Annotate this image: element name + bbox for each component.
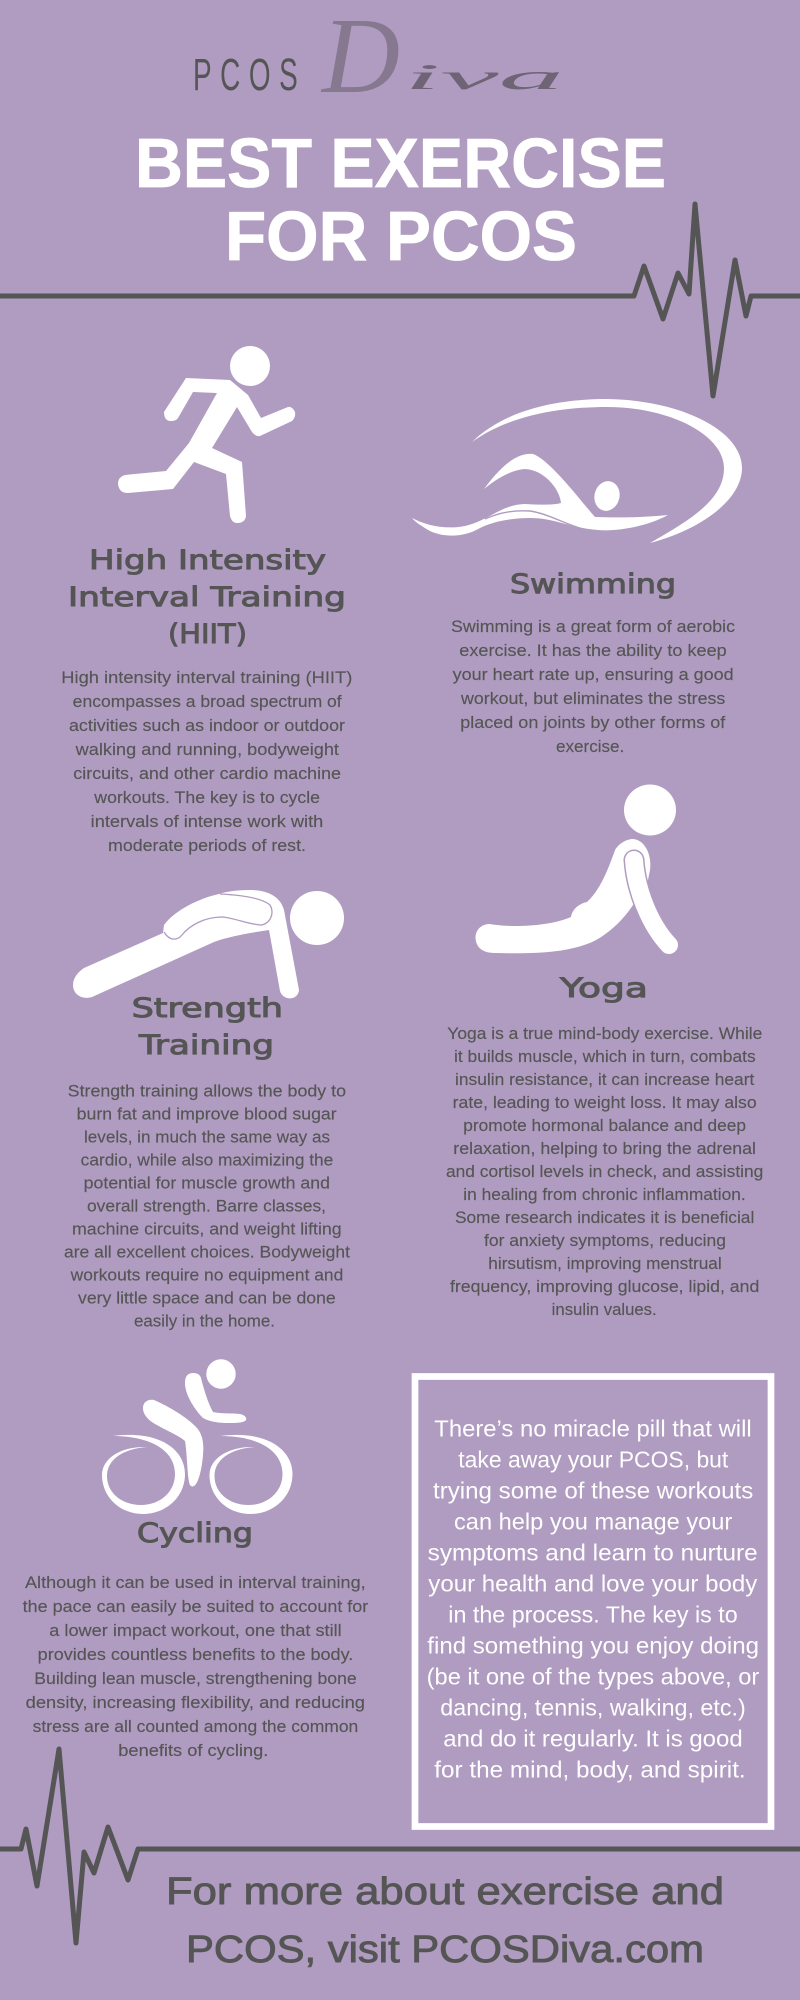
text: cycling description: the pace can easily be suited to account for	[23, 1598, 369, 1616]
callout: closing message box: trying some of these workouts	[433, 1478, 753, 1504]
text: strength description: workouts require no equipment and	[70, 1267, 343, 1285]
text: cycling description: stress are all counted among the common	[33, 1718, 358, 1736]
text: strength description	[64, 1083, 350, 1331]
text: strength description: levels, in much the same way as	[84, 1129, 330, 1147]
text: HIIT description: encompasses a broad spectrum of	[73, 693, 342, 711]
text: cycling description	[23, 1574, 369, 1760]
text: HIIT description: moderate periods of rest.	[108, 837, 306, 855]
text: cycling description: density, increasing flexibility, and reducing	[26, 1694, 365, 1712]
text: swimming description: Swimming is a great form of aerobic	[451, 618, 735, 636]
text: cycling description: a lower impact workout, one that still	[49, 1622, 342, 1640]
text: HIIT description: High intensity interval training (HIIT)	[61, 669, 352, 687]
callout: closing message box: There’s no miracle pill that will	[434, 1416, 752, 1442]
callout: closing message box: take away your PCOS, but	[458, 1447, 729, 1473]
text: cycling description: Although it can be used in interval training,	[25, 1574, 366, 1592]
icon: swimmer	[412, 399, 742, 543]
text: HIIT description	[61, 669, 352, 855]
text: strength description: are all excellent choices. Bodyweight	[64, 1244, 350, 1262]
text: swimming description	[451, 618, 735, 756]
heading: strength training	[132, 993, 283, 1061]
text: yoga description: rate, leading to weight loss. It may also	[453, 1094, 757, 1112]
logo: PCOS Diva: D	[320, 0, 400, 116]
panel: cycling	[23, 1359, 369, 1760]
top heartbeat line	[0, 204, 800, 396]
panel: HIIT	[61, 346, 352, 855]
callout: closing message box: your health and love your body	[428, 1571, 758, 1597]
text: yoga description: and cortisol levels in check, and assisting	[446, 1163, 763, 1181]
text: swimming description: exercise.	[556, 738, 624, 756]
text: swimming description: your heart rate up, ensuring a good	[453, 666, 734, 684]
logo: PCOS Diva: iva	[404, 57, 564, 97]
text: yoga description: for anxiety symptoms, reducing	[484, 1232, 726, 1250]
callout: closing message box: symptoms and learn to nurture	[428, 1540, 758, 1566]
text: yoga description: relaxation, helping to bring the adrenal	[453, 1140, 756, 1158]
footer call to action: For more about exercise and	[166, 1871, 724, 1913]
text: yoga description	[446, 1025, 763, 1319]
callout: closing message box: find something you enjoy doing	[427, 1633, 759, 1659]
text: yoga description: insulin resistance, it can increase heart	[455, 1071, 755, 1089]
heading: HIIT: Interval Training	[68, 582, 346, 613]
text: yoga description: Yoga is a true mind-body exercise. While	[447, 1025, 762, 1043]
heading: strength training: Strength	[132, 993, 283, 1024]
heading: HIIT: High Intensity	[89, 545, 326, 576]
callout: closing message box: in the process. The key is to	[448, 1602, 738, 1628]
icon: yoga pose	[476, 784, 676, 953]
callout: closing message box: can help you manage your	[454, 1509, 732, 1535]
logo: PCOS Diva: PCOS	[193, 49, 298, 100]
text: swimming description: exercise. It has the ability to keep	[459, 642, 727, 660]
heading: yoga: Yoga	[559, 973, 648, 1004]
text: strength description: burn fat and improve blood sugar	[77, 1106, 337, 1124]
text: strength description: overall strength. Barre classes,	[87, 1198, 326, 1216]
icon: cyclist	[102, 1359, 292, 1514]
footer call to action	[166, 1871, 724, 1971]
icon: runner	[118, 346, 295, 523]
text: strength description: Strength training allows the body to	[68, 1083, 346, 1101]
panel: strength training	[64, 890, 350, 1331]
heading: HIIT: (HIIT)	[168, 619, 247, 650]
bottom heartbeat line	[0, 1749, 800, 1943]
title: BEST EXERCISE	[135, 124, 666, 202]
callout: closing message box	[415, 1376, 771, 1826]
logo: PCOS Diva	[193, 0, 564, 116]
text: strength description: very little space and can be done	[78, 1290, 336, 1308]
text: swimming description: placed on joints by other forms of	[460, 714, 726, 732]
text: yoga description: in healing from chronic inflammation.	[463, 1186, 746, 1204]
footer call to action: PCOS, visit PCOSDiva.com	[186, 1929, 704, 1971]
title	[135, 124, 666, 275]
text: strength description: potential for muscle growth and	[84, 1175, 330, 1193]
text: yoga description: Some research indicates it is beneficial	[455, 1209, 754, 1227]
text: HIIT description: circuits, and other cardio machine	[73, 765, 341, 783]
text: cycling description: provides countless benefits to the body.	[38, 1646, 353, 1664]
text: HIIT description: activities such as indoor or outdoor	[69, 717, 346, 735]
callout: closing message box: dancing, tennis, walking, etc.)	[440, 1695, 746, 1721]
text: cycling description: Building lean muscle, strengthening bone	[34, 1670, 357, 1688]
text: yoga description: insulin values.	[552, 1301, 657, 1319]
text: HIIT description: walking and running, bodyweight	[75, 741, 339, 759]
text: yoga description: frequency, improving glucose, lipid, and	[450, 1278, 759, 1296]
callout: closing message box: for the mind, body, and spirit.	[434, 1757, 746, 1783]
heading: strength training: Training	[138, 1030, 274, 1061]
text: strength description: machine circuits, and weight lifting	[72, 1221, 342, 1239]
text: strength description: easily in the home.	[134, 1313, 275, 1331]
text: cycling description: benefits of cycling.	[118, 1742, 268, 1760]
title: FOR PCOS	[225, 197, 577, 275]
heading: cycling: Cycling	[137, 1518, 253, 1549]
panel: yoga	[446, 784, 763, 1319]
text: yoga description: hirsutism, improving menstrual	[488, 1255, 722, 1273]
text: yoga description: promote hormonal balance and deep	[463, 1117, 746, 1135]
heading: HIIT	[68, 545, 346, 650]
callout: closing message box: (be it one of the types above, or	[427, 1664, 759, 1690]
text: HIIT description: intervals of intense work with	[91, 813, 323, 831]
icon: push-up figure	[73, 890, 344, 998]
text: HIIT description: workouts. The key is to cycle	[93, 789, 320, 807]
text: yoga description: it builds muscle, which in turn, combats	[454, 1048, 756, 1066]
heading: swimming: Swimming	[510, 569, 676, 600]
panel: swimming	[412, 399, 742, 756]
text: swimming description: workout, but eliminates the stress	[460, 690, 725, 708]
callout: closing message box: and do it regularly. It is good	[443, 1726, 743, 1752]
text: strength description: cardio, while also maximizing the	[81, 1152, 333, 1170]
